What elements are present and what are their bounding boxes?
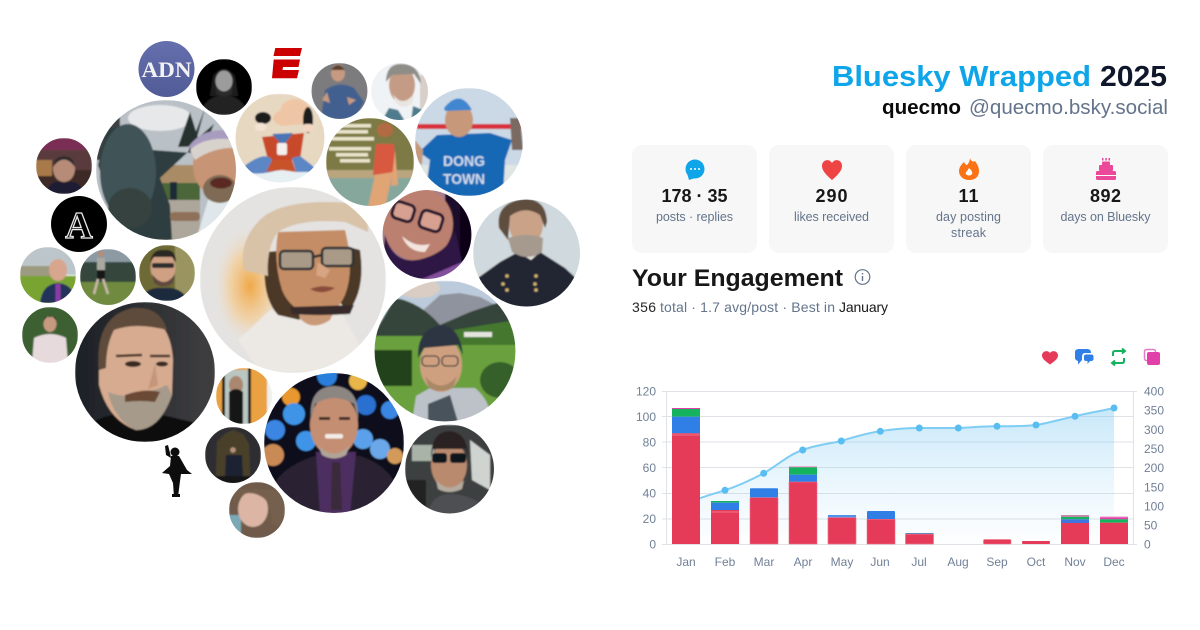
month labels [676,555,1125,569]
left axis labels: 80 [643,436,656,450]
month labels: Oct [1027,555,1046,569]
panel: days on Bluesky [1043,145,1168,253]
left axis labels: 40 [643,486,656,500]
user handle: quecmo [882,97,961,119]
avatar: main user illustrated portrait in hat [200,187,386,373]
avatar: person taking mirror selfie [216,368,273,424]
icon: legend quotes [1144,350,1160,365]
icon: info [855,270,870,284]
chart legend [1042,348,1160,366]
month labels: Sep [986,555,1008,569]
month labels: Apr [794,555,812,569]
bar: Mar [750,488,778,544]
icon: cake [1096,158,1116,180]
panel: day posting streak: streak [951,226,987,240]
avatar: retro pin-up poster [326,118,414,208]
avatar: man on iron throne [205,427,261,484]
avatar: man in blue Dong Town shirt: DONG [443,153,485,170]
icon: legend heart [1042,351,1058,364]
month labels: Jul [911,555,927,569]
icon: speech bubble [686,160,704,180]
bar: Oct [1022,541,1050,544]
bar: Nov [1061,515,1089,544]
avatar: man in black and white [196,59,252,115]
avatar: smiling man with purple tint [382,187,472,282]
avatar: ADN logo: ADN [142,57,192,82]
engagement summary: January [839,299,888,315]
icon: caped silhouette figure [162,445,192,497]
avatar bubble cluster [20,41,581,538]
avatar: man in blue Dong Town shirt: TOWN [443,171,485,188]
avatar: silver-haired man [371,63,429,122]
title: Bluesky Wrapped [832,61,1091,93]
avatar: woman with brown hair [229,482,285,538]
panel: likes received: likes received [794,210,869,224]
right axis labels: 400 [1144,384,1164,398]
right axis labels: 350 [1144,404,1164,418]
avatar: colourised Civil War general [473,199,581,308]
panel: likes received [769,145,894,253]
icon: ESPN logo [272,48,302,78]
month labels: Feb [715,555,736,569]
left axis labels: 0 [649,538,656,552]
right axis labels: 200 [1144,461,1164,475]
cumulative line [686,404,1118,503]
engagement summary: 356 [632,299,656,315]
left axis labels: 120 [636,384,656,398]
engagement summary [632,299,888,315]
right axis labels [1144,384,1164,552]
avatar: A logo on black: A [65,205,93,247]
month labels: Nov [1064,555,1086,569]
bar: May [828,515,856,544]
bar: Jan [672,408,700,544]
stacked bars [672,408,1128,544]
right axis labels: 100 [1144,500,1164,514]
left axis labels: 100 [636,410,656,424]
user handle: @quecmo.bsky.social [969,97,1168,119]
right axis labels: 250 [1144,442,1164,456]
month labels: Mar [754,555,774,569]
month labels: May [831,555,853,569]
month labels: Jun [870,555,890,569]
combo chart: monthly engagement [636,384,1164,569]
right axis labels: 150 [1144,480,1164,494]
avatar: cartoon dog hero [235,94,325,185]
right axis labels: 50 [1144,518,1158,532]
avatar: smiling man with bokeh lights [262,366,404,515]
avatar: man in pink shirt against ivy [22,307,78,363]
heading: your engagement: Your Engagement [632,265,843,292]
avatar: golfer [80,249,136,306]
avatar: man in suit before legislature [20,247,76,304]
avatar: man in blue Dong Town shirt [415,88,523,196]
avatar: ADN logo [138,41,194,97]
avatar: woman under aurora [36,138,92,194]
engagement summary: total · 1.7 avg/post · Best in [660,299,835,315]
icon: legend replies [1075,349,1094,364]
left axis labels [636,384,656,552]
panel: posts and replies: 178 · 35 [662,186,728,206]
right axis labels: 300 [1144,423,1164,437]
avatar: man with glasses and beard [139,245,195,301]
left axis labels: 20 [643,512,656,526]
panel: day posting streak: 11 [958,186,978,206]
month labels: Dec [1103,555,1125,569]
bar: Feb [711,501,739,544]
bar: Sep [984,540,1011,544]
avatar: man with grey beard [75,302,215,442]
bar: Dec [1100,516,1128,544]
avatar: man with cap in mountain valley [374,278,520,422]
panel: days on Bluesky: days on Bluesky [1060,210,1151,224]
title: 2025 [1100,61,1167,93]
left axis labels: 60 [643,461,656,475]
month labels: Aug [947,555,969,569]
right axis labels: 0 [1144,538,1151,552]
panel: day posting streak: day posting [936,210,1001,224]
cumulative area [686,408,1114,544]
month labels: Jan [676,555,696,569]
icon: flame [959,158,979,180]
chart grid [662,391,1137,544]
panel: day posting streak [906,145,1031,253]
user handle [882,97,1168,119]
panel: days on Bluesky: 892 [1090,186,1121,206]
avatar: A logo on black [51,196,107,252]
bar: Apr [789,466,817,544]
panel: posts and replies: posts · replies [656,210,733,224]
avatar: man in sunglasses inside car [405,425,495,515]
icon: heart [822,160,842,180]
bar: Jul [906,533,934,544]
panel: posts and replies [632,145,757,253]
bar: Jun [867,511,895,544]
avatar: moose statue selfie [96,100,241,242]
icon: legend reposts [1112,348,1125,366]
panel: likes received: 290 [816,186,848,206]
avatar: man in blue shirt pointing [311,63,368,120]
